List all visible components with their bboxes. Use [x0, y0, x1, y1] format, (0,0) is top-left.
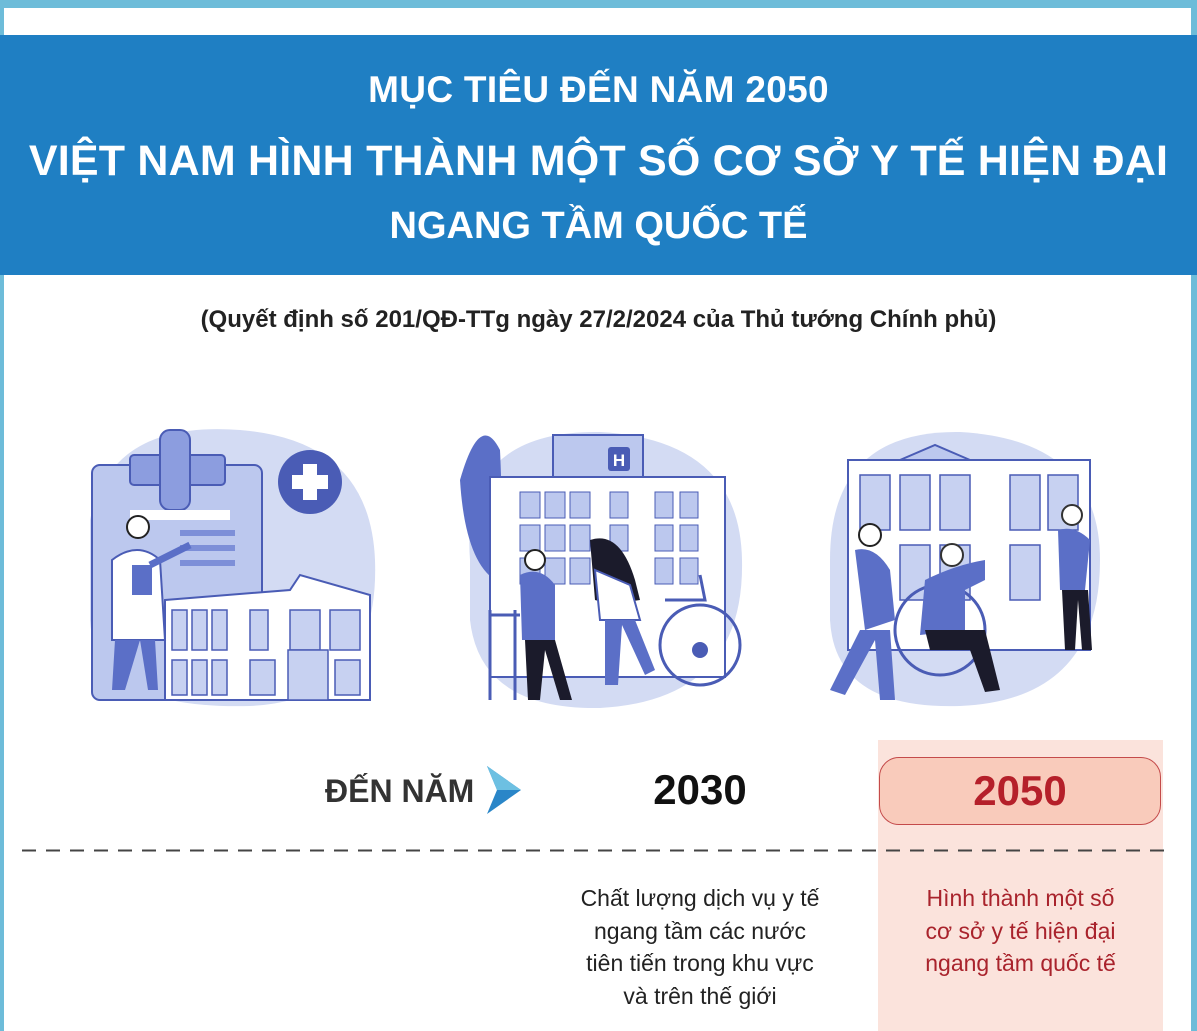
text 2050: cơ sở y tế hiện đại	[926, 918, 1115, 944]
icon: doctor clipboard building	[90, 429, 375, 706]
dashed divider	[22, 850, 1164, 852]
year 2050 box	[879, 757, 1161, 825]
text 2030: tiên tiến trong khu vực	[586, 950, 814, 976]
row label: ĐẾN NĂM	[325, 773, 474, 809]
text 2030: Chất lượng dịch vụ y tế	[581, 885, 819, 911]
year 2030: 2030	[653, 766, 747, 813]
text 2050: ngang tầm quốc tế	[925, 950, 1116, 976]
text 2050: Hình thành một số	[927, 885, 1114, 911]
pink column	[878, 740, 1163, 1031]
icon: arrow	[487, 766, 521, 814]
subtitle: (Quyết định số 201/QĐ-TTg ngày 27/2/2024 của Thủ tướng Chính phủ)	[201, 306, 996, 333]
title: MỤC TIÊU ĐẾN NĂM 2050	[368, 69, 829, 110]
text 2030: và trên thế giới	[623, 982, 777, 1008]
text 2030	[581, 885, 820, 1009]
text 2050	[925, 885, 1116, 976]
text 2030: ngang tầm các nước	[594, 918, 806, 944]
title: NGANG TẦM QUỐC TẾ	[390, 205, 807, 247]
icon: hospital with patients	[460, 432, 742, 708]
icon: wheelchair and elderly	[830, 432, 1100, 706]
title	[0, 35, 1197, 275]
year 2050 box: 2050	[973, 767, 1067, 814]
title: VIỆT NAM HÌNH THÀNH MỘT SỐ CƠ SỞ Y TẾ HIỆN ĐẠI	[29, 137, 1168, 185]
illustrations	[90, 429, 1100, 708]
icon: hospital with patients: H	[613, 451, 625, 470]
